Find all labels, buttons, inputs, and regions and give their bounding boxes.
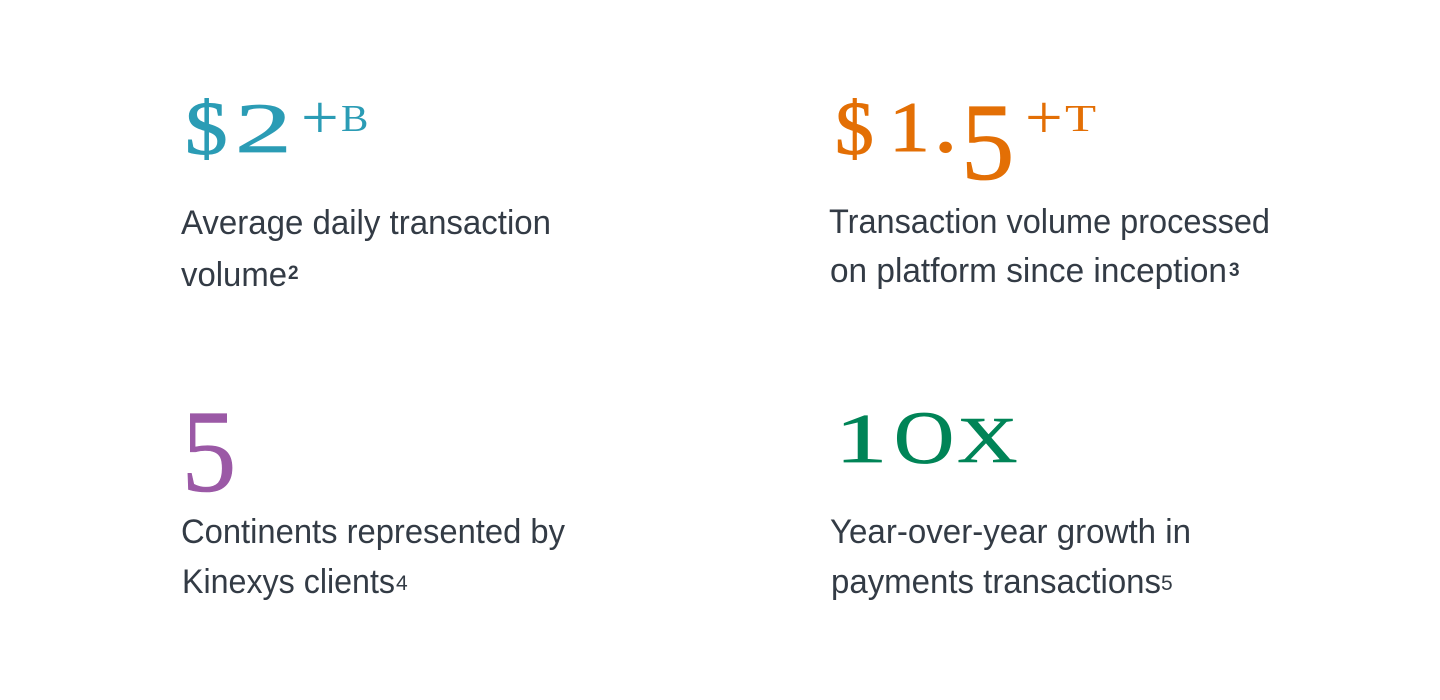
stat: $2+B [185,83,368,171]
description: average daily transaction volume: 2 [288,263,299,284]
stat: $1.5+T: . [936,89,955,167]
description: average daily transaction volume: volume [181,256,287,294]
stat: 5: 5 [182,385,236,517]
stat: $2+B: B [341,97,368,140]
stat: 10X: 1 [835,400,887,478]
stat: $1.5+T: 5 [961,82,1014,203]
stat: $1.5+T: T [1065,97,1096,139]
description: year-over-year growth in payments transactions: Year-over-year growth in [830,513,1191,551]
stat: 10X: X [957,404,1018,477]
description: transaction volume processed on platform since inception [829,203,1270,290]
stat: $1.5+T: 1 [889,88,930,167]
description: transaction volume processed on platform since inception: Transaction volume processed [829,203,1270,241]
description: continents represented by Kinexys clients [181,513,565,601]
stat: $1.5+T: $ [835,87,874,171]
stat: 10X: O [894,397,954,480]
description: transaction volume processed on platform since inception: 3 [1229,260,1240,281]
description: average daily transaction volume: Average daily transaction [181,204,551,242]
stat: $1.5+T: + [1025,83,1063,151]
panel: transaction volume processed [829,82,1270,290]
description: average daily transaction volume [181,204,551,294]
description: continents represented by Kinexys clients: 4 [396,572,408,595]
stat: 10X [835,397,1018,480]
stat: $2+B: 2 [235,90,292,168]
description: continents represented by Kinexys clients: Kinexys clients [182,563,395,601]
stat: $2+B: $ [185,87,228,171]
description: year-over-year growth in payments transactions: 5 [1161,572,1173,595]
description: year-over-year growth in payments transactions [830,513,1191,601]
description: transaction volume processed on platform since inception: on platform since inception [830,252,1227,290]
stat: $2+B: + [301,83,339,151]
description: year-over-year growth in payments transactions: payments transactions [831,563,1161,601]
panel: average daily transaction volume [181,83,551,294]
panel: year-over-year growth [830,397,1191,601]
description: continents represented by Kinexys clients: Continents represented by [181,513,565,551]
stat: $1.5+T [835,82,1096,203]
panel: continents represented [181,385,565,601]
